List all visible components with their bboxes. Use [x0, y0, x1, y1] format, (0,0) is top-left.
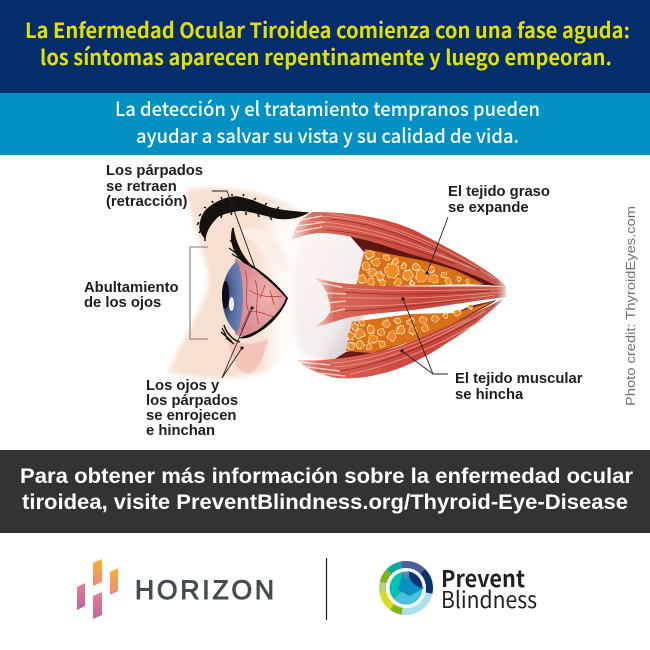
label: bulging eyes: Abultamiento — [84, 280, 179, 296]
dark band above lower muscle — [330, 300, 497, 362]
dark band under upper muscle — [350, 236, 500, 286]
eyelid fold highlight — [240, 228, 288, 272]
header band: acute phase statement: La Enfermedad Ocular Tiroidea comienza con una fase aguda: — [25, 15, 630, 45]
label: redness and swelling: se enrojecen — [146, 408, 236, 424]
logo: Prevent Blindness: Blindness — [441, 581, 537, 615]
upper eyelashes — [229, 228, 253, 268]
lower eyelashes — [221, 325, 240, 344]
call to action band: tiroidea, visite PreventBlindness.org/Thyroid-Eye-Disease — [22, 491, 628, 514]
eye anatomy illustration — [168, 188, 507, 378]
logo: Prevent Blindness: Prevent — [441, 560, 525, 594]
label: redness and swelling — [146, 378, 238, 439]
fatty tissue upper — [356, 249, 484, 287]
subheader band: early detection message — [0, 93, 650, 155]
label: fatty tissue: se expande — [448, 200, 529, 216]
fatty tissue lower — [346, 301, 494, 353]
subheader band: early detection message: La detección y el tratamiento tempranos pueden — [115, 93, 540, 122]
subheader band: early detection message: ayudar a salvar su vista y su calidad de vida. — [136, 120, 519, 149]
skin fade towards globe — [268, 205, 345, 375]
iris — [222, 261, 243, 333]
header band: acute phase statement — [0, 0, 650, 93]
face skin — [168, 188, 305, 378]
call to action band: Para obtener más información sobre la enfermedad ocular — [20, 465, 633, 488]
lower muscle — [297, 298, 505, 378]
label: muscle tissue: El tejido muscular — [455, 371, 583, 387]
label: eyelid retraction: Los párpados — [106, 163, 203, 179]
lower eyelid pink bulge — [226, 335, 268, 373]
bracket: bulging of the eyes — [190, 247, 208, 339]
pupil — [222, 281, 229, 309]
label: fatty tissue — [448, 184, 550, 216]
label: redness and swelling: e hinchan — [146, 423, 215, 439]
label: bulging eyes: de los ojos — [84, 295, 161, 311]
logo: Prevent Blindness — [382, 560, 537, 615]
logo: Horizon: HORIZON — [135, 575, 274, 605]
eyelid outline — [238, 258, 288, 338]
upper muscle — [292, 212, 507, 287]
logo: Horizon — [77, 559, 274, 619]
label: redness and swelling: los párpados — [146, 393, 238, 409]
eyebrow — [197, 194, 307, 241]
label: bulging eyes — [84, 280, 179, 311]
iris highlight — [229, 297, 234, 311]
header band: acute phase statement: los síntomas aparecen repentinamente y luego empeoran. — [40, 42, 612, 72]
middle muscle — [315, 278, 506, 327]
leader lines — [212, 191, 448, 378]
call to action band — [0, 450, 650, 533]
label: eyelid retraction — [106, 163, 203, 210]
label: redness and swelling: Los ojos y — [146, 378, 220, 394]
eye sclera — [235, 258, 287, 337]
label: muscle tissue: se hincha — [455, 387, 524, 403]
label: muscle tissue — [455, 371, 583, 403]
label: eyelid retraction: (retracción) — [106, 194, 187, 210]
globe behind muscles — [294, 235, 372, 366]
label: fatty tissue: El tejido graso — [448, 184, 550, 200]
photo credit: Photo credit: ThyroidEyes.com — [623, 206, 638, 406]
blood vessels — [241, 270, 282, 330]
label: eyelid retraction: se retraen — [106, 179, 177, 195]
